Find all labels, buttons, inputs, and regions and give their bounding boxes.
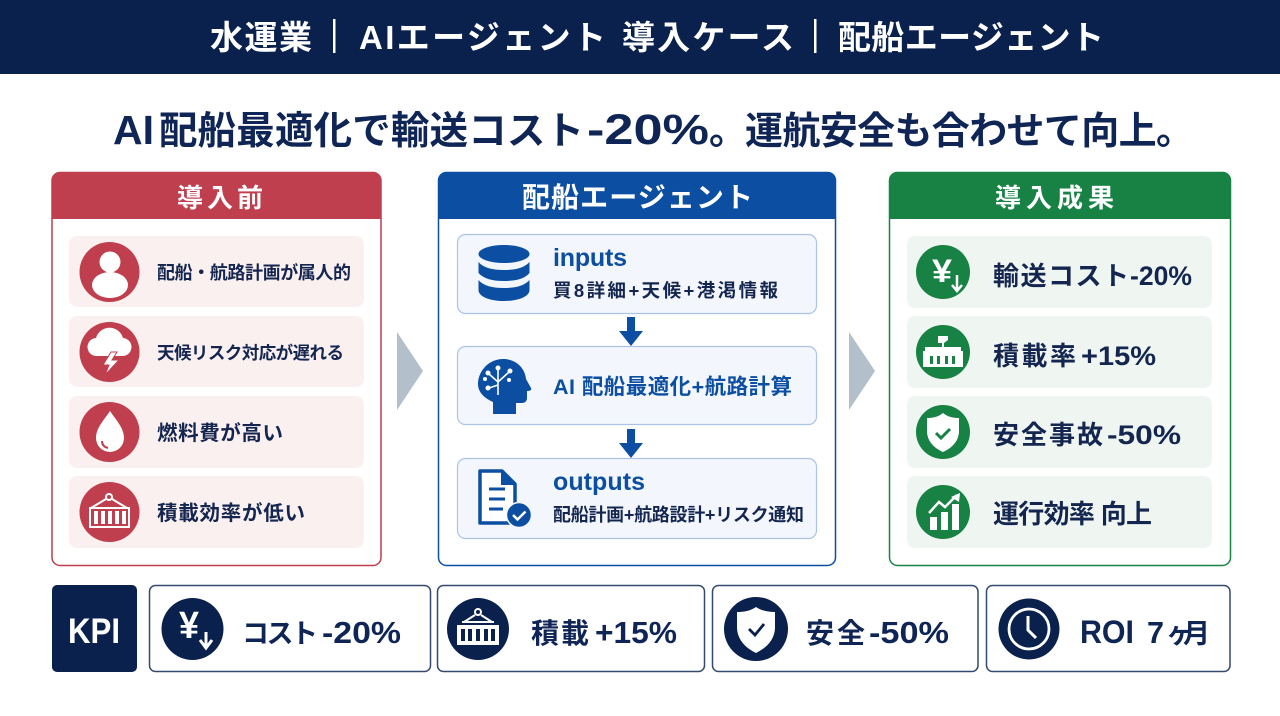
arrow: agent to results <box>849 332 875 410</box>
step: inputs: inputs <box>553 244 627 272</box>
row: operating efficiency <box>907 476 1212 548</box>
row: loading rate <box>907 316 1212 388</box>
top banner: 導入ケース <box>622 19 794 56</box>
row: transport cost <box>907 236 1212 308</box>
panel: dispatch agent <box>438 172 836 566</box>
row: person-dependent planning <box>69 236 364 307</box>
row: low loading efficiency <box>69 476 364 548</box>
KPI card: cost: コスト <box>242 619 318 649</box>
panel: before adoption <box>52 172 381 566</box>
KPI card: ROI <box>986 586 1230 672</box>
main headline: -20% <box>587 106 709 154</box>
step: AI: AI 配船最適化+航路計算 <box>553 375 792 399</box>
top banner: 水運業 <box>210 19 312 56</box>
arrow: before to agent <box>397 332 423 410</box>
step: AI <box>458 346 816 424</box>
step: outputs: 配船計画+航路設計+リスク通知 <box>553 505 804 525</box>
panel: results: 導入成果 <box>995 183 1114 213</box>
row: operating efficiency: 運行効率 向上 <box>993 499 1152 529</box>
main headline: 配船最適化で輸送コスト <box>159 110 584 153</box>
top banner: 配船エージェント <box>838 19 1104 56</box>
main headline: AI <box>113 107 154 153</box>
KPI label: KPI <box>68 612 120 651</box>
row: transport cost: ¥ <box>932 253 952 289</box>
row: low loading efficiency: 積載効率が低い <box>157 501 305 525</box>
row: safety incidents: -50% <box>1107 420 1181 450</box>
row: weather risk: 天候リスク対応が遅れる <box>157 343 344 363</box>
main headline: 運航安全も合わせて向上。 <box>745 111 1194 153</box>
top banner: AIエージェント <box>359 19 606 56</box>
step: inputs: 買8詳細+天候+港渇情報 <box>553 280 778 301</box>
KPI card: ROI: ROI <box>1080 614 1134 650</box>
KPI label <box>52 585 137 672</box>
step: outputs: outputs <box>553 468 645 496</box>
arrow: inputs to AI <box>619 317 643 346</box>
KPI card: ROI: 7 <box>1147 615 1164 650</box>
top banner <box>0 0 1280 74</box>
row: weather risk <box>69 316 364 387</box>
KPI card: loading <box>438 586 704 672</box>
KPI card: ROI: ヶ月 <box>1166 619 1210 649</box>
step: outputs <box>458 458 816 538</box>
KPI card: loading: 積載 <box>531 618 589 649</box>
row: loading rate: 積載率 <box>993 341 1076 371</box>
panel: dispatch agent: 配船エージェント <box>522 182 753 213</box>
row: person-dependent planning: 配船・航路計画が属人的 <box>157 262 351 283</box>
row: loading rate: +15% <box>1081 341 1156 371</box>
main headline: 。 <box>709 111 747 153</box>
KPI card: loading: +15% <box>595 615 677 650</box>
row: high fuel cost: 燃料費が高い <box>157 421 283 445</box>
row: high fuel cost <box>69 396 364 468</box>
KPI card: safety <box>712 586 978 672</box>
step: inputs <box>458 234 816 314</box>
row: safety incidents <box>907 396 1212 468</box>
arrow: AI to outputs <box>619 429 643 458</box>
panel: before adoption: 導入前 <box>177 183 263 213</box>
panel: results <box>889 172 1231 566</box>
row: safety incidents: 安全事故 <box>993 420 1103 450</box>
main headline <box>113 106 1194 154</box>
KPI card: cost: -20% <box>322 615 401 650</box>
row: transport cost: -20% <box>1130 261 1192 291</box>
KPI card: cost: ¥ <box>179 605 199 647</box>
KPI card: cost <box>150 586 430 672</box>
row: transport cost: 輸送コスト <box>993 261 1129 291</box>
KPI card: safety: -50% <box>869 615 949 650</box>
KPI card: safety: 安全 <box>806 618 865 649</box>
